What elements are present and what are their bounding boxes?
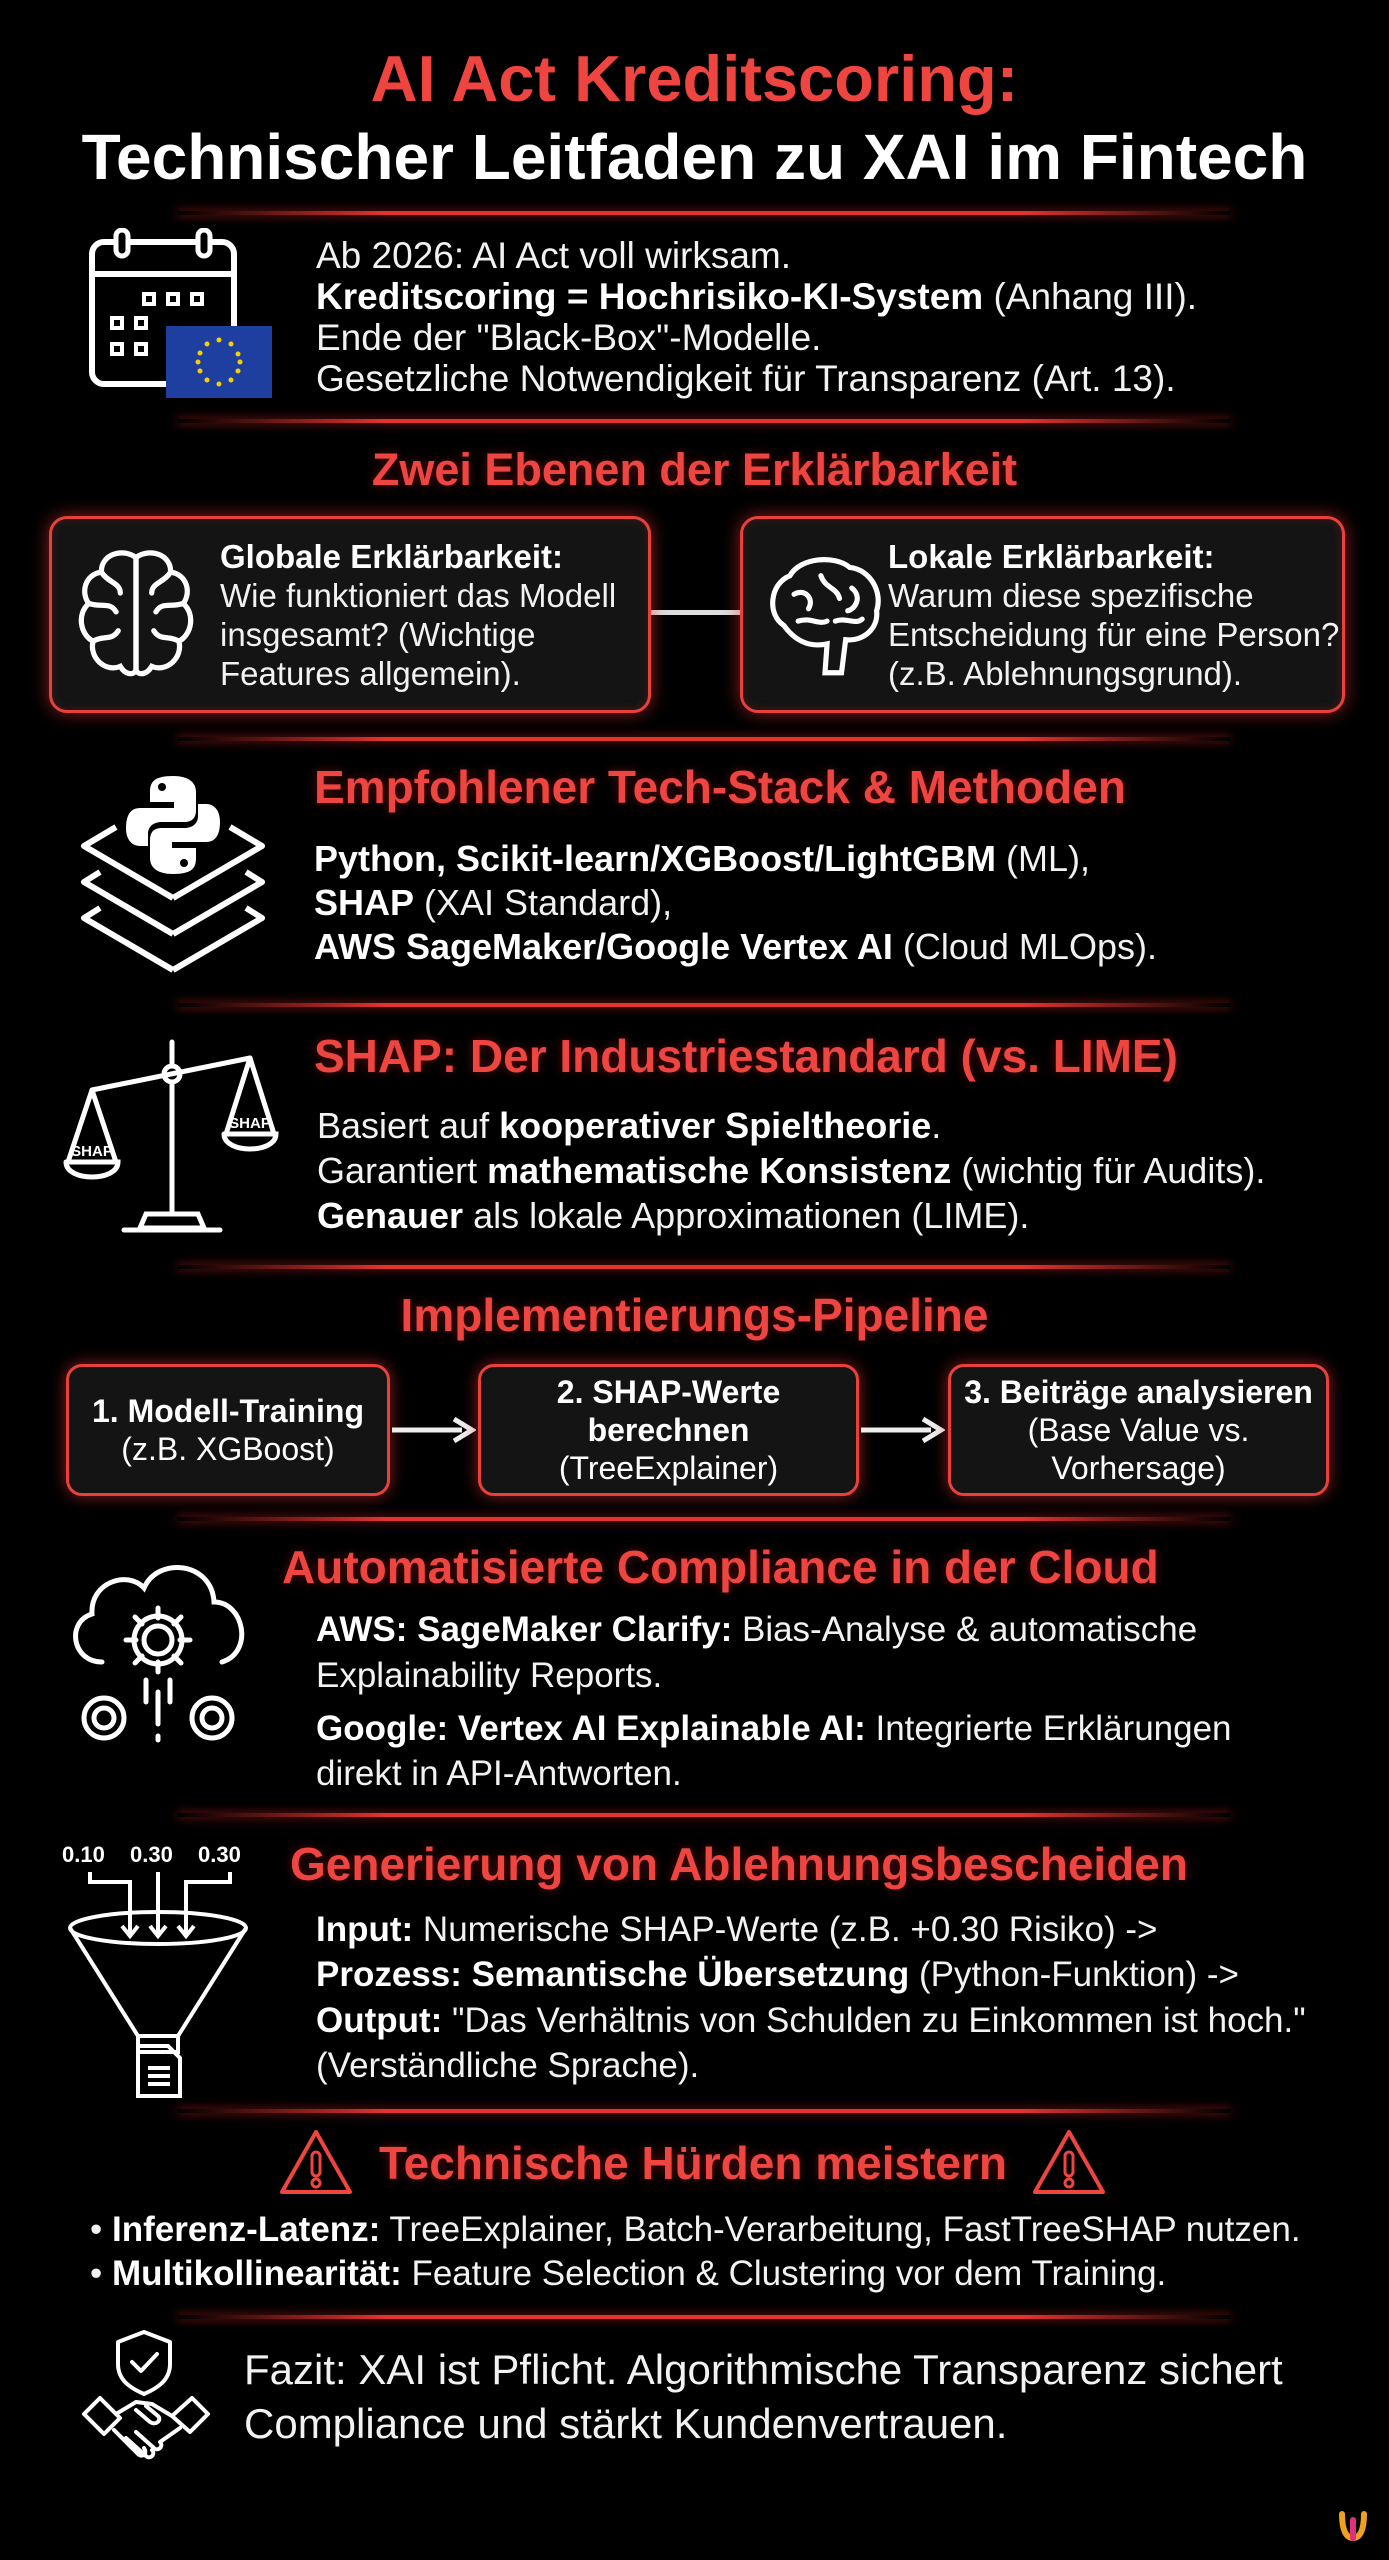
icon: balance scale: SHAP [229, 1115, 271, 1132]
text block: SHAP: Garantiert mathematische Konsistenz (wichtig für Audits). [317, 1150, 1265, 1191]
pipeline step 3 [948, 1364, 1329, 1496]
text: conclusion: Fazit: XAI ist Pflicht. Algorithmische Transparenz sichert [244, 2346, 1283, 2393]
bullet list: hurdles: • Multikollinearität: Feature Selection & Clustering vor dem Training. [90, 2254, 1166, 2293]
text: direkt in API-Antworten. [316, 1754, 682, 1793]
pipeline step 3: Vorhersage) [1051, 1450, 1226, 1486]
pipeline step 2: (TreeExplainer) [559, 1450, 778, 1486]
text block: compliance: Explainability Reports. [316, 1656, 662, 1695]
text: global: Features allgemein). [220, 655, 521, 692]
icon: funnel with values [62, 1842, 248, 2098]
pipeline step 1: (z.B. XGBoost) [121, 1431, 335, 1467]
connector line [651, 610, 741, 615]
text: global: insgesamt? (Wichtige [220, 616, 535, 653]
icon: brain side [770, 557, 881, 676]
heading: Zwei Ebenen: Zwei Ebenen der Erklärbarkeit [372, 444, 1017, 495]
text block: SHAP [317, 1105, 1265, 1236]
pipeline step 1: 1. Modell-Training [92, 1393, 364, 1429]
text block: compliance [316, 1610, 1197, 1695]
text: conclusion: Compliance und stärkt Kundenvertrauen. [244, 2400, 1007, 2447]
icon: calendar with EU flag [89, 228, 272, 398]
pipeline step 2: berechnen [588, 1412, 749, 1448]
text block: SHAP: Basiert auf kooperativer Spieltheorie. [317, 1105, 941, 1146]
arrow 2 [861, 1416, 945, 1444]
heading: pipeline: Implementierungs-Pipeline [401, 1289, 988, 1341]
icon: shield handshake [82, 2330, 210, 2460]
text block: Ablehnungsbescheide: Input: Numerische SHAP-Werte (z.B. +0.30 Risiko) -> [316, 1910, 1157, 1949]
logo [1339, 2511, 1367, 2541]
text: global: Wie funktioniert das Modell [220, 577, 616, 614]
heading: SHAP: SHAP: Der Industriestandard (vs. LIME) [314, 1030, 1178, 1082]
text block: compliance: AWS: SageMaker Clarify: Bias-Analyse & automatische [316, 1610, 1197, 1649]
text: local: Warum diese spezifische [888, 577, 1254, 614]
text block: SHAP: Genauer als lokale Approximationen (LIME). [317, 1195, 1029, 1236]
text block: Ablehnungsbescheide: (Verständliche Sprache). [316, 2046, 699, 2085]
pipeline step 3: 3. Beiträge analysieren [964, 1374, 1313, 1410]
icon: cloud with gears [73, 1565, 244, 1742]
bullet list: hurdles [90, 2210, 1301, 2293]
title: Technischer Leitfaden zu XAI im Fintech [82, 121, 1307, 193]
heading: Ablehnungsbescheide: Generierung von Ablehnungsbescheiden [290, 1838, 1188, 1890]
text block: intro [316, 235, 1197, 399]
text: local: (z.B. Ablehnungsgrund). [888, 655, 1242, 692]
text: local: Lokale Erklärbarkeit: [888, 538, 1214, 575]
text: local [888, 538, 1339, 692]
icon: balance scale [64, 1040, 278, 1232]
text block: intro: Gesetzliche Notwendigkeit für Transparenz (Art. 13). [316, 358, 1176, 399]
text block: Ablehnungsbescheide [316, 1910, 1306, 2085]
icon: funnel with values: 0.10 [62, 1842, 105, 1867]
icon: warning right [1033, 2130, 1106, 2194]
title [82, 42, 1307, 193]
arrow 1 [392, 1416, 476, 1444]
text block: intro: Ende der "Black-Box"-Modelle. [316, 317, 821, 358]
text: local: Entscheidung für eine Person? [888, 616, 1339, 653]
heading: compliance: Automatisierte Compliance in der Cloud [282, 1541, 1159, 1593]
panel: global [49, 516, 651, 713]
text: global [220, 538, 616, 692]
pipeline step 2 [478, 1364, 859, 1496]
text block: tech stack: SHAP (XAI Standard), [314, 882, 672, 923]
text block: Ablehnungsbescheide: Output: "Das Verhältnis von Schulden zu Einkommen ist hoch." [316, 2001, 1306, 2040]
icon: balance scale: SHAP [71, 1143, 113, 1160]
heading text: Technische Hürden meistern [379, 2137, 1007, 2189]
pipeline step 2: 2. SHAP-Werte [557, 1374, 780, 1410]
heading: Technische Hürden with warning icons [280, 2130, 1106, 2194]
pipeline step 1 [66, 1364, 390, 1496]
icon: warning left [280, 2130, 352, 2194]
bullet list: hurdles: • Inferenz-Latenz: TreeExplainer, Batch-Verarbeitung, FastTreeSHAP nutzen. [90, 2210, 1301, 2249]
text block: tech stack: AWS SageMaker/Google Vertex AI (Cloud MLOps). [314, 926, 1157, 967]
text block: intro: Kreditscoring = Hochrisiko-KI-System (Anhang III). [316, 276, 1197, 317]
icon: python layers stack [81, 776, 265, 973]
text block: tech stack [314, 838, 1157, 967]
text: Google: Vertex AI Explainable AI: Integrierte Erklärungen [316, 1709, 1232, 1748]
text: conclusion [244, 2346, 1283, 2447]
pipeline step 3: (Base Value vs. [1028, 1412, 1249, 1448]
icon: funnel with values: 0.30 [198, 1842, 241, 1867]
icon: brain [78, 550, 194, 676]
text: global: Globale Erklärbarkeit: [220, 538, 563, 575]
icon: funnel with values: 0.30 [130, 1842, 173, 1867]
title: AI Act Kreditscoring: [371, 42, 1018, 115]
text block: tech stack: Python, Scikit-learn/XGBoost/LightGBM (ML), [314, 838, 1090, 879]
panel: local [740, 516, 1345, 713]
text block: intro: Ab 2026: AI Act voll wirksam. [316, 235, 791, 276]
heading: tech stack: Empfohlener Tech-Stack & Methoden [314, 761, 1126, 813]
text block: Ablehnungsbescheide: Prozess: Semantische Übersetzung (Python-Funktion) -> [316, 1955, 1239, 1994]
